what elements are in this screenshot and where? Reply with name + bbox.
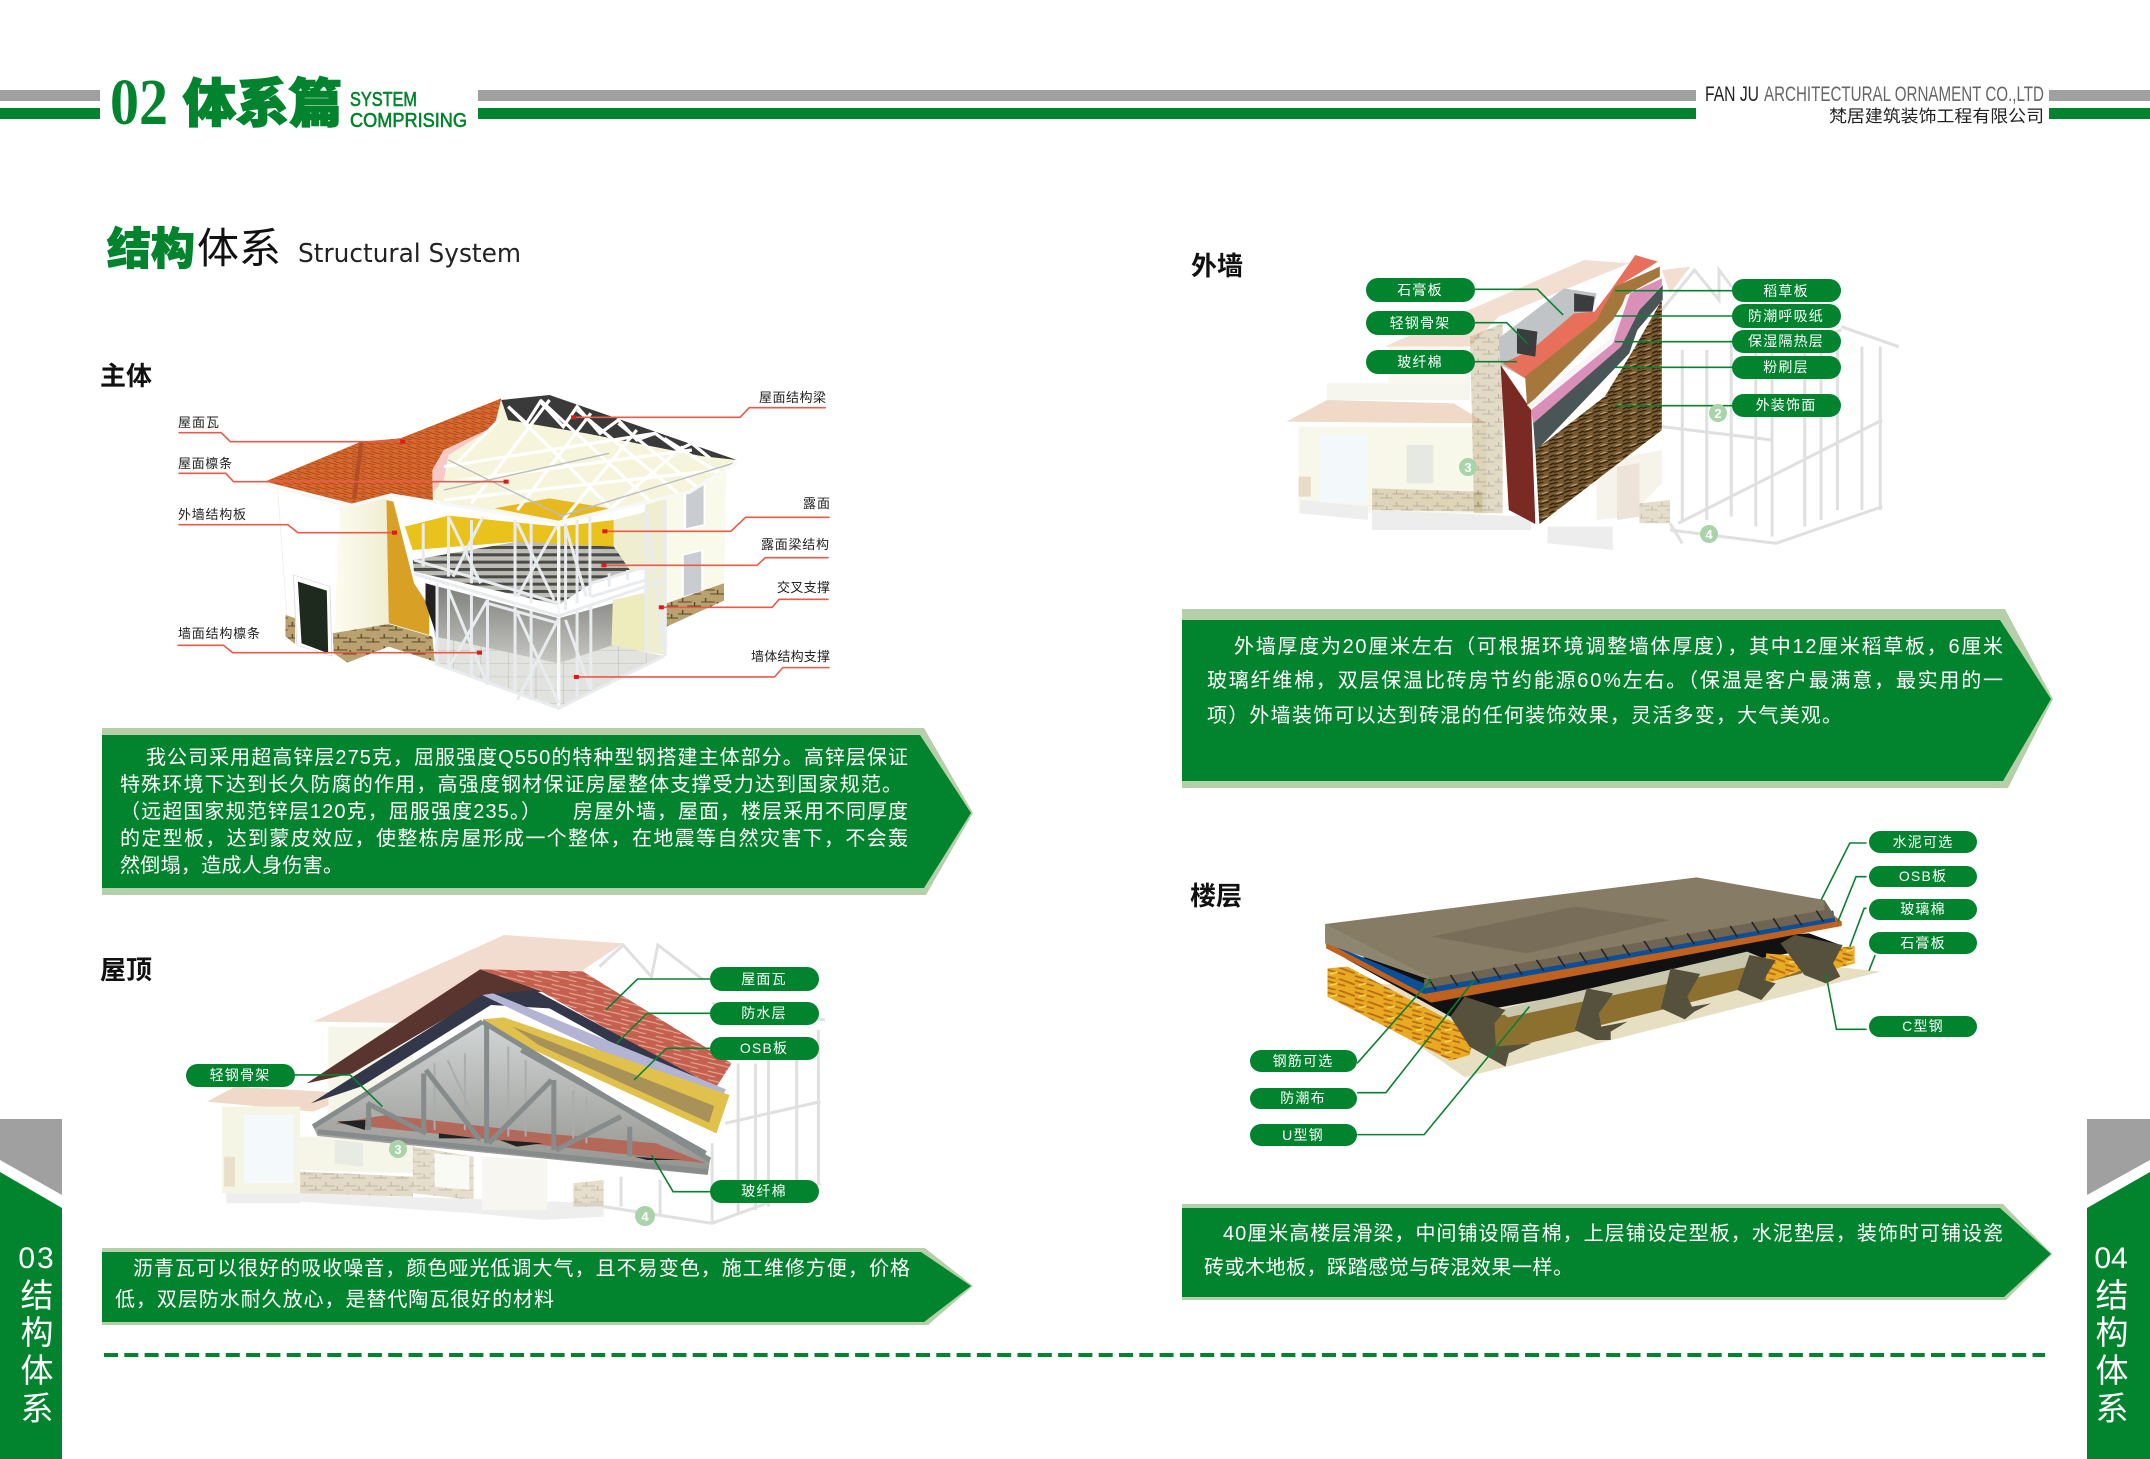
label pills: exterior wall: 保湿隔热层 xyxy=(1748,333,1824,349)
section title: 体系 xyxy=(197,225,281,272)
label pills: roof xyxy=(186,967,819,1203)
label pills: roof: OSB板 xyxy=(740,1040,788,1056)
left side tab: 体 xyxy=(20,1352,54,1389)
label pills: exterior wall: 粉刷层 xyxy=(1763,359,1809,375)
labels: main body parts: 屋面瓦 xyxy=(178,415,219,430)
labels: main body parts xyxy=(178,390,830,664)
illustration: steel house cutaway xyxy=(178,395,830,708)
company name: 梵居建筑装饰工程有限公司 xyxy=(1829,107,2044,126)
company name: FAN JU xyxy=(1705,83,1759,106)
text panel: main body: 的定型板，达到蒙皮效应，使整栋房屋形成一个整体，在地震等自然灾害下，不会轰 xyxy=(120,827,908,850)
label pills: exterior wall: 石膏板 xyxy=(1397,282,1443,298)
text panel: main body xyxy=(102,728,973,895)
text panel: exterior wall: 外墙厚度为20厘米左右（可根据环境调整墙体厚度），其中12厘米稻草板，6厘米 xyxy=(1234,635,2003,658)
heading: exterior wall: 外墙 xyxy=(1191,251,1243,281)
text panel: exterior wall xyxy=(1182,609,2053,788)
text panel: main body: 然倒塌，造成人身伤害。 xyxy=(120,854,343,877)
label pills: floor: C型钢 xyxy=(1902,1018,1944,1034)
ghost house numbers: roof: 4 xyxy=(641,1209,649,1224)
text panel: floor: 砖或木地板，踩踏感觉与砖混效果一样。 xyxy=(1204,1256,1573,1279)
left side tab: 结 xyxy=(20,1277,54,1314)
labels: main body parts: 露面梁结构 xyxy=(761,537,829,552)
header title: 体系篇 xyxy=(183,76,342,134)
label pills: roof: 防水层 xyxy=(741,1005,787,1021)
label pills: exterior wall xyxy=(1366,278,1841,417)
text panel: main body: 房屋外墙，屋面，楼层采用不同厚度 xyxy=(573,800,908,823)
right side tab: 体 xyxy=(2096,1352,2128,1389)
text panel: roof: 沥青瓦可以很好的吸收噪音，颜色哑光低调大气，且不易变色，施工维修方便，价格 xyxy=(133,1257,910,1280)
left side tab xyxy=(0,1119,62,1459)
label pills: floor: 石膏板 xyxy=(1900,935,1946,951)
illustration: floor cutaway xyxy=(1325,843,1881,1135)
label pills: exterior wall: 外装饰面 xyxy=(1756,397,1816,413)
header title: COMPRISING xyxy=(350,109,467,132)
header bars xyxy=(0,90,2150,119)
label pills: floor: 水泥可选 xyxy=(1893,834,1953,850)
label pills: roof: 屋面瓦 xyxy=(741,971,787,987)
text panel: floor xyxy=(1182,1204,2052,1300)
left side tab: 系 xyxy=(20,1390,54,1427)
label pills: floor xyxy=(1250,831,1977,1146)
heading: main body: 主体 xyxy=(100,361,152,391)
right side tab: 构 xyxy=(2096,1314,2128,1351)
right side tab: 结 xyxy=(2096,1277,2128,1314)
illustration: roof cutaway xyxy=(207,935,825,1223)
label pills: exterior wall: 防潮呼吸纸 xyxy=(1748,308,1824,324)
heading: floor: 楼层 xyxy=(1190,881,1242,911)
ghost house numbers: 3 xyxy=(1464,460,1472,475)
label pills: floor: U型钢 xyxy=(1282,1127,1324,1143)
ghost house numbers: 4 xyxy=(1705,527,1713,542)
labels: main body parts: 露面 xyxy=(803,496,830,511)
labels: main body parts: 墙面结构檩条 xyxy=(178,626,260,641)
text panel: floor: 40厘米高楼层滑梁，中间铺设隔音棉，上层铺设定型板，水泥垫层，装饰时可铺设瓷 xyxy=(1223,1222,2003,1245)
company name: ARCHITECTURAL ORNAMENT CO.,LTD xyxy=(1764,83,2044,106)
label pills: roof: 轻钢骨架 xyxy=(210,1067,270,1083)
label pills: floor: 钢筋可选 xyxy=(1273,1053,1333,1069)
labels: main body parts: 墙体结构支撑 xyxy=(751,649,830,664)
label pills: roof: 玻纤棉 xyxy=(741,1183,787,1199)
section title: Structural System xyxy=(298,239,521,269)
right side tab: 04 xyxy=(2094,1242,2128,1275)
ghost house numbers: roof xyxy=(389,1140,655,1226)
left side tab: 构 xyxy=(20,1314,54,1351)
ghost house numbers xyxy=(1459,404,1727,543)
label pills: exterior wall: 轻钢骨架 xyxy=(1390,315,1450,331)
text panel: roof xyxy=(102,1248,973,1325)
text panel: main body: 我公司采用超高锌层275克，屈服强度Q550的特种型钢搭建主体部分。高锌层保证 xyxy=(146,746,908,769)
ghost house numbers: roof: 3 xyxy=(394,1142,402,1157)
dashed divider xyxy=(104,1353,2045,1357)
text panel: roof: 低，双层防水耐久放心，是替代陶瓦很好的材料 xyxy=(115,1288,554,1311)
ghost house numbers: 2 xyxy=(1714,406,1722,421)
label pills: floor: OSB板 xyxy=(1899,868,1947,884)
right side tab: 系 xyxy=(2096,1390,2128,1427)
labels: main body parts: 屋面结构梁 xyxy=(759,390,826,405)
text panel: main body: 特殊环境下达到长久防腐的作用，高强度钢材保证房屋整体支撑受力达到国家规范。 xyxy=(120,773,902,796)
text panel: main body: （远超国家规范锌层120克，屈服强度235。） xyxy=(120,800,541,823)
label pills: exterior wall: 玻纤棉 xyxy=(1397,354,1443,370)
header title: SYSTEM xyxy=(350,88,417,111)
company name xyxy=(1705,83,2044,126)
illustration: exterior wall cutaway xyxy=(1286,255,1899,550)
left side tab: 03 xyxy=(18,1242,56,1275)
heading: roof: 屋顶 xyxy=(100,955,152,985)
section title xyxy=(107,225,521,274)
header title: 02 xyxy=(110,66,168,139)
labels: main body parts: 屋面檩条 xyxy=(178,456,232,471)
label pills: floor: 玻璃棉 xyxy=(1900,901,1946,917)
section title: 结构 xyxy=(107,225,195,274)
labels: main body parts: 交叉支撑 xyxy=(777,580,830,595)
text panel: exterior wall: 项）外墙装饰可以达到砖混的任何装饰效果，灵活多变，大气美观。 xyxy=(1207,704,1842,727)
right side tab xyxy=(2087,1119,2150,1459)
labels: main body parts: 外墙结构板 xyxy=(178,507,246,522)
label pills: exterior wall: 稻草板 xyxy=(1763,283,1809,299)
label pills: floor: 防潮布 xyxy=(1280,1090,1326,1106)
text panel: exterior wall: 玻璃纤维棉，双层保温比砖房节约能源60%左右。（保温是客户最满意，最实用的一 xyxy=(1207,669,2003,692)
header title xyxy=(110,66,467,139)
